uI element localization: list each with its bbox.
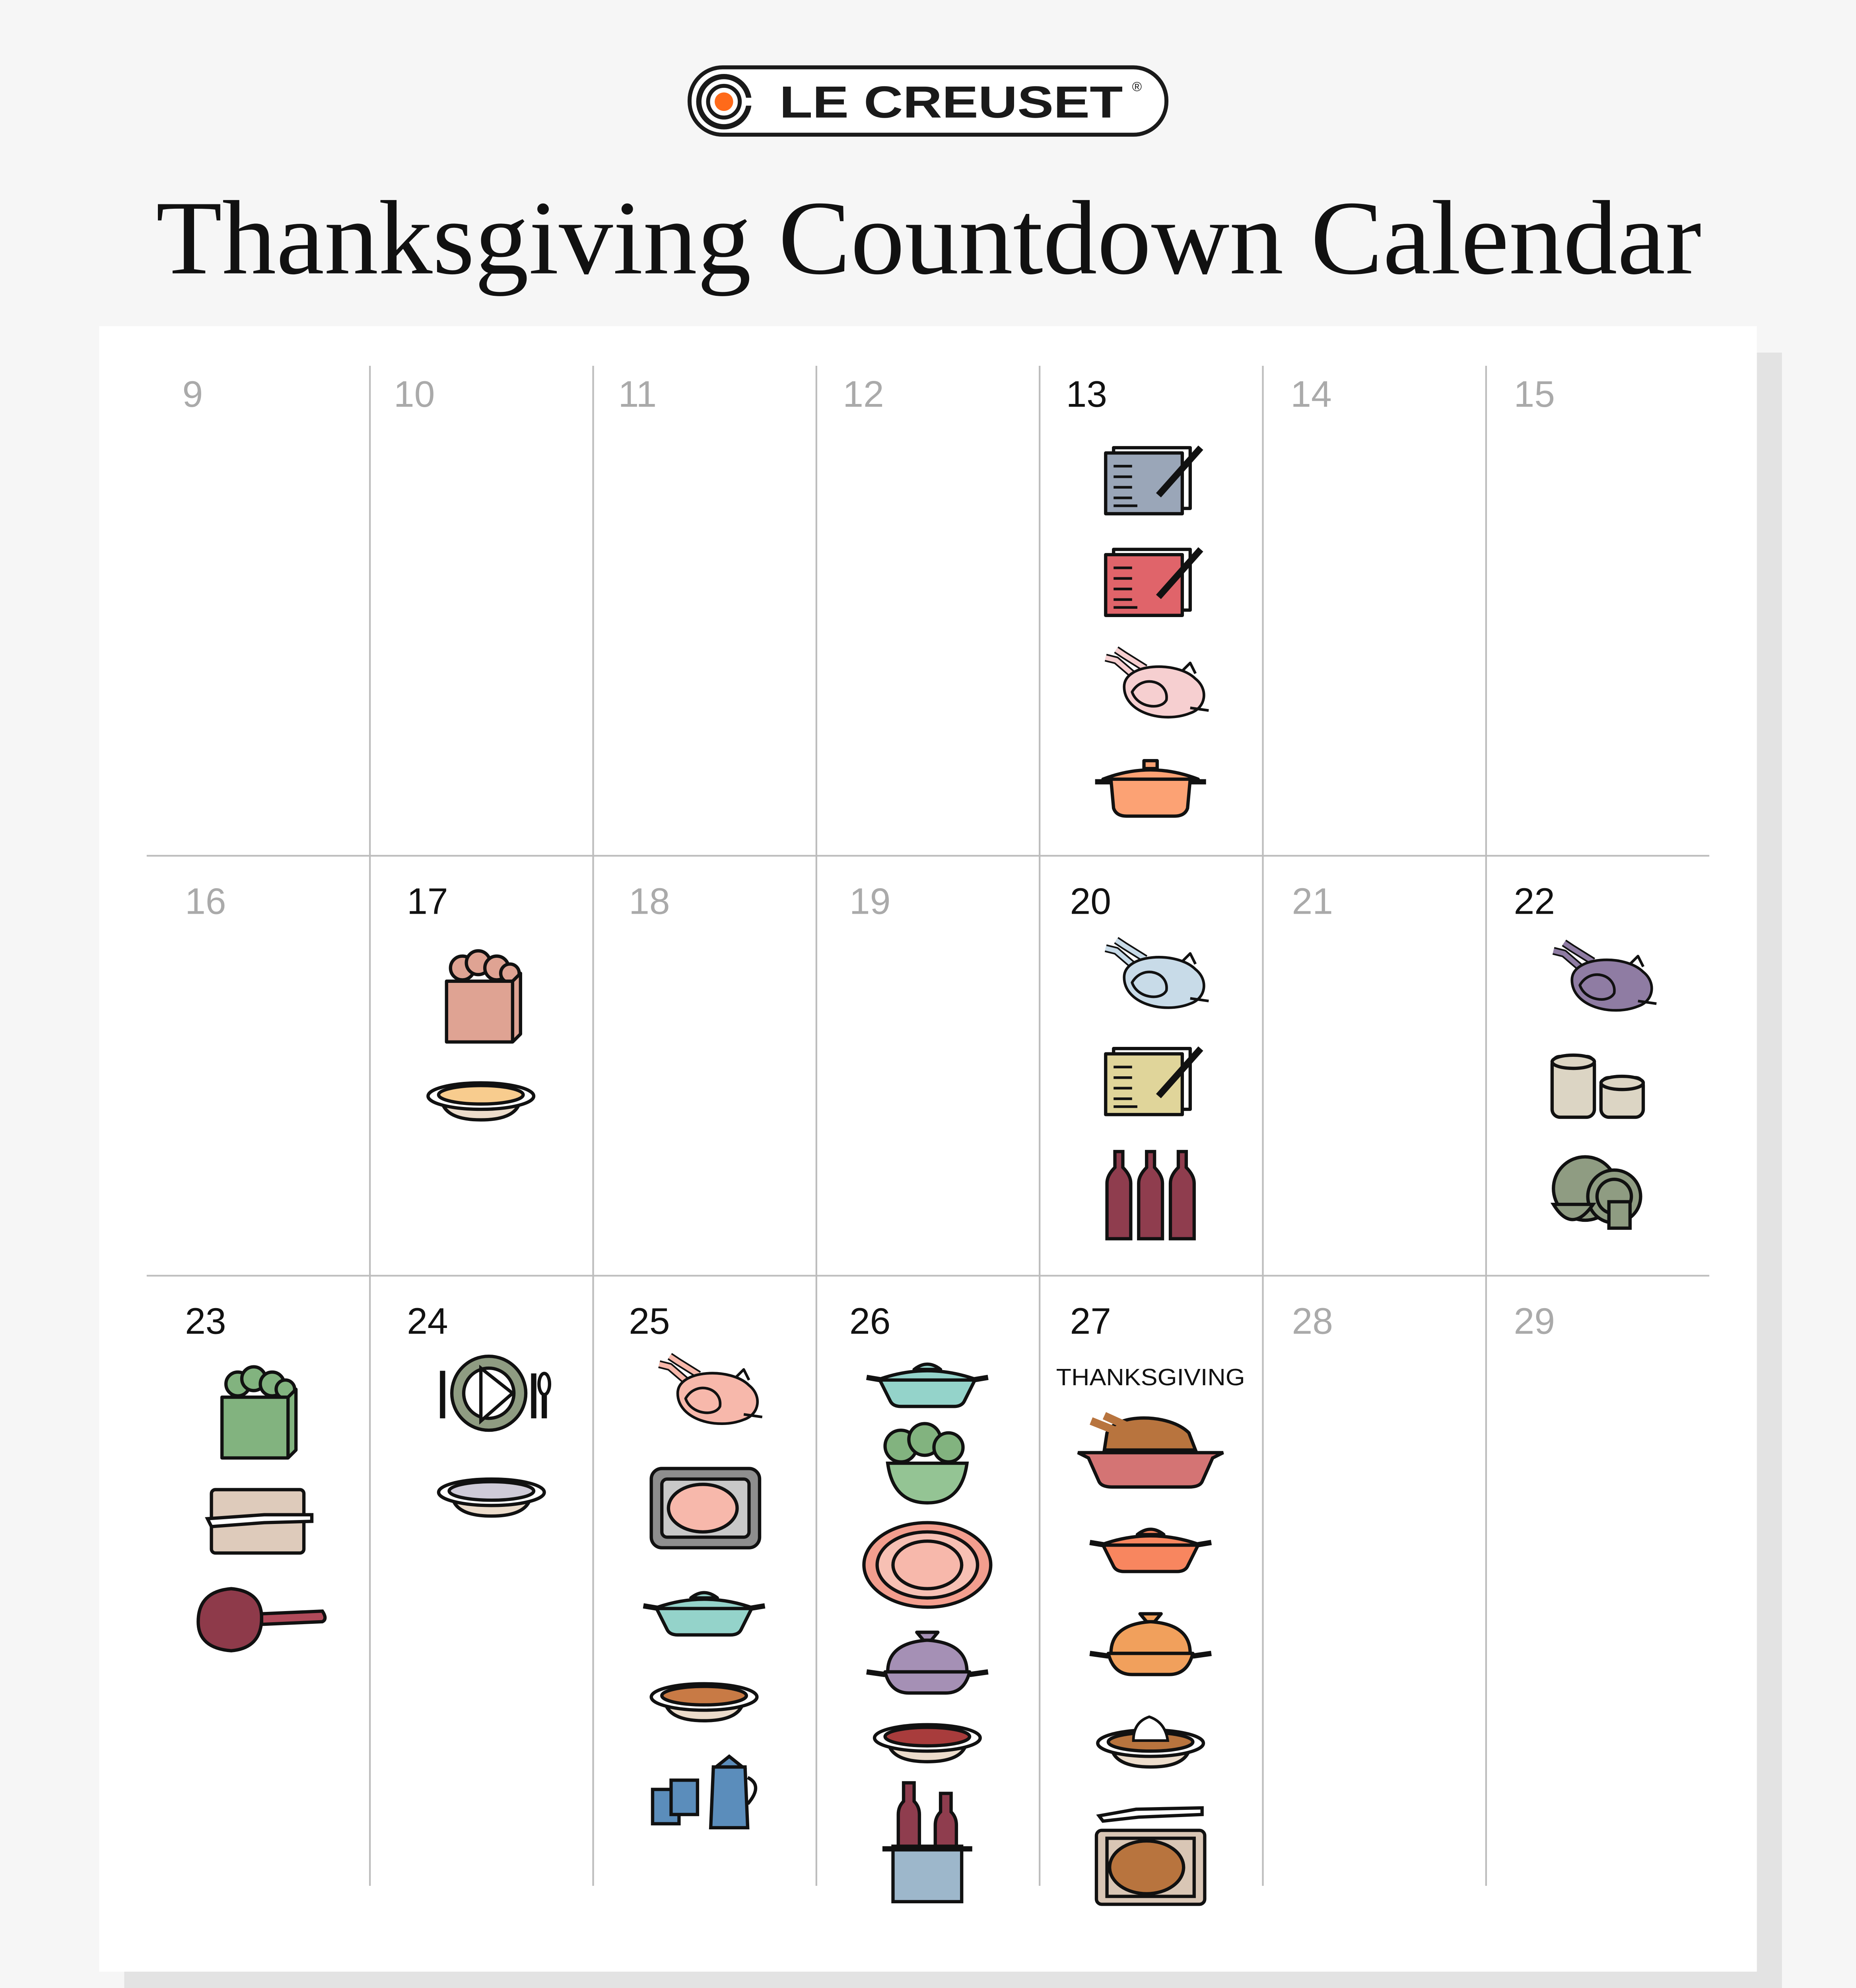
day numbers: 25: [629, 1301, 670, 1342]
logo: LE CREUSET: [779, 77, 1123, 127]
logo: ®: [1132, 80, 1142, 94]
day numbers: 20: [1070, 880, 1111, 922]
day 20 icons: [1106, 940, 1209, 1239]
day 27 label: THANKSGIVING: [1056, 1364, 1245, 1390]
day numbers: 21: [1292, 880, 1333, 922]
day numbers: 19: [849, 880, 890, 922]
card shadow: [124, 353, 1782, 1988]
day numbers: 22: [1514, 880, 1555, 922]
day numbers: 11: [618, 373, 657, 415]
day 26 icons: [864, 1364, 991, 1902]
day numbers: 24: [407, 1301, 448, 1342]
day numbers: 29: [1514, 1301, 1555, 1342]
day numbers: 18: [629, 880, 670, 922]
day 22 icons: [1552, 943, 1656, 1228]
day numbers: 26: [849, 1301, 890, 1342]
day numbers: [183, 373, 1555, 1342]
day numbers: 13: [1066, 373, 1107, 415]
day 27 icons: [1078, 1416, 1223, 1905]
day numbers: 15: [1514, 373, 1555, 415]
day numbers: 14: [1290, 373, 1332, 415]
day 24 icons: [439, 1356, 550, 1516]
logo: [690, 67, 1166, 135]
day 13 icons: [1095, 448, 1209, 816]
day numbers: 27: [1070, 1301, 1111, 1342]
day numbers: 10: [394, 373, 435, 415]
day 23 icons: [198, 1367, 325, 1651]
day numbers: 16: [185, 880, 226, 922]
day numbers: 12: [843, 373, 884, 415]
day numbers: 9: [183, 373, 203, 415]
day numbers: 28: [1292, 1301, 1333, 1342]
day 17 icons: [428, 951, 534, 1120]
day 25 icons: [643, 1356, 765, 1828]
day numbers: 17: [407, 880, 448, 922]
title: Thanksgiving Countdown Calendar: [156, 180, 1701, 297]
day numbers: 23: [185, 1301, 226, 1342]
calendar card: [99, 326, 1757, 1972]
